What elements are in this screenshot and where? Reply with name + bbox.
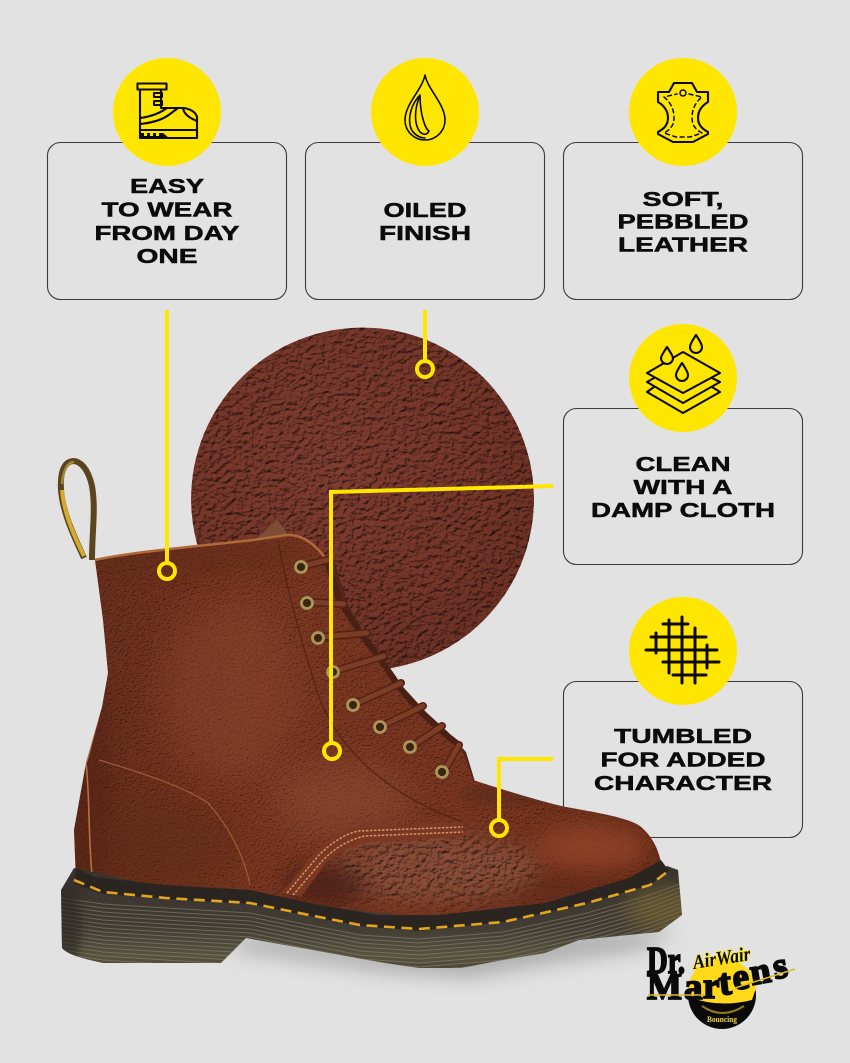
eyelets [296, 562, 448, 778]
panel: clean with a damp cloth [564, 324, 802, 564]
laces [303, 560, 459, 771]
heading: oiled finish: OILED [384, 199, 466, 222]
heading: oiled finish: FINISH [379, 222, 471, 245]
boot photo illustration [54, 461, 705, 995]
logo text: AirWair: AirWair [690, 943, 752, 974]
heading: tumbled for added character [594, 725, 772, 795]
callout line: tumbled for added character [491, 759, 553, 836]
vamp stitch band [282, 822, 463, 897]
heading: clean with a damp cloth [591, 453, 775, 522]
sole [61, 866, 682, 968]
callout line: oiled finish [417, 310, 433, 377]
heading: soft pebbled leather: PEBBLED [618, 210, 748, 234]
lace tongue under laces [318, 550, 476, 785]
heading: tumbled for added character: CHARACTER [594, 772, 772, 795]
collar edge [95, 535, 327, 560]
heading: soft pebbled leather: SOFT, [642, 188, 724, 211]
heading: easy to wear: FROM DAY [94, 222, 240, 245]
leather swatch circle [191, 328, 534, 670]
callout line: clean with a damp cloth [324, 486, 553, 759]
black welt band [74, 860, 669, 931]
boot ground shadow [225, 930, 680, 978]
icon: oil drop badge [371, 58, 479, 166]
panel: easy to wear [48, 58, 286, 300]
shading on upper [66, 537, 648, 910]
icon: layered cloth and water drops badge [629, 324, 737, 432]
heading: easy to wear [94, 175, 240, 268]
heading: tumbled for added character: FOR ADDED [600, 748, 766, 772]
logo text: Dr.: Dr. [647, 940, 685, 982]
logo badge [688, 958, 756, 1029]
heading: oiled finish [379, 199, 471, 245]
heading: soft pebbled leather: LEATHER [618, 234, 748, 256]
logo: Dr. Martens AirWair [647, 940, 795, 1029]
icon: leather hide badge [629, 58, 737, 166]
yellow welt stitching [74, 872, 667, 929]
heading: easy to wear: TO WEAR [102, 198, 233, 222]
heading: clean with a damp cloth: DAMP CLOTH [591, 499, 775, 522]
panel: tumbled for added character [564, 597, 802, 838]
pull tab loop [61, 461, 94, 560]
heading: easy to wear: ONE [136, 245, 198, 268]
upper leather [74, 536, 660, 915]
heading: tumbled for added character: TUMBLED [614, 725, 752, 748]
heading: easy to wear: EASY [130, 175, 204, 198]
laces and eyelets [296, 560, 459, 778]
panel: oiled finish [306, 58, 544, 300]
sole ridges [61, 884, 682, 968]
boot tongue [253, 519, 292, 542]
icon: boot badge [113, 58, 221, 166]
logo yellow stripes [648, 969, 795, 995]
dark vamp shading [283, 865, 367, 905]
icon: cross-hatch grain badge [629, 597, 737, 705]
logo badge: Bouncing [707, 1015, 737, 1024]
heading: soft pebbled leather [618, 188, 748, 256]
heading: clean with a damp cloth: CLEAN [636, 453, 730, 476]
logo text: Martens: Martens [647, 945, 791, 1008]
pebbled toe grain [326, 822, 547, 914]
heading: clean with a damp cloth: WITH A [634, 476, 733, 499]
eyestay and heel seams [86, 540, 463, 885]
callout line: easy to wear [159, 310, 175, 579]
panel: soft pebbled leather [564, 58, 802, 300]
